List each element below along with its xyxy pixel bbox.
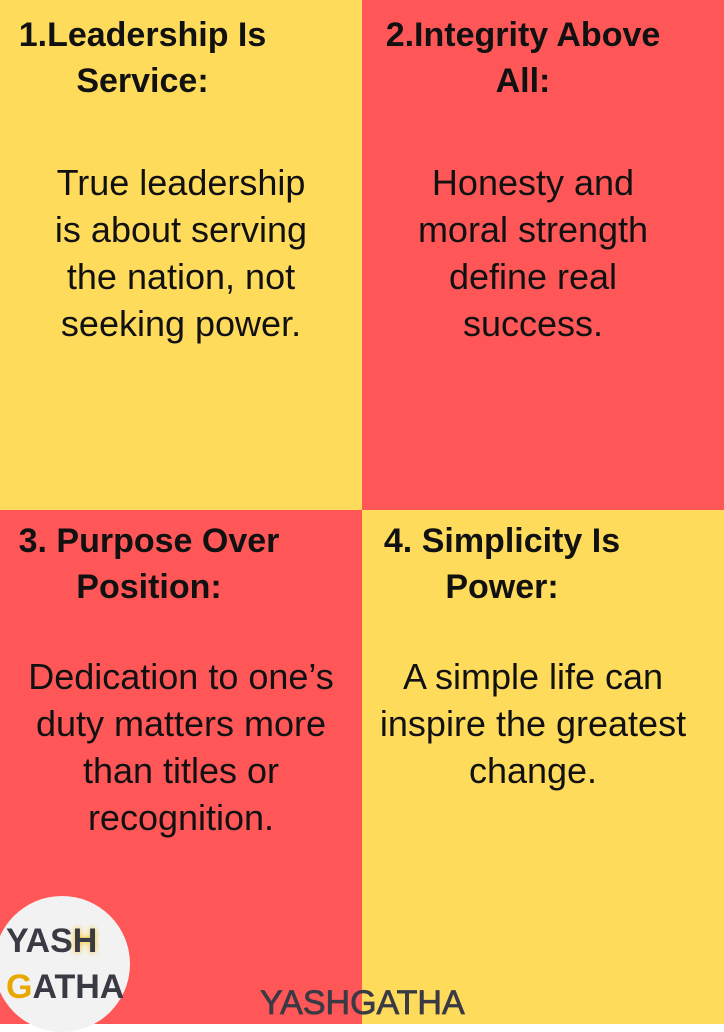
body text 3: Dedication to one’s — [28, 656, 334, 697]
panel: simplicity is power — [362, 510, 724, 1024]
body text 1: is about serving — [55, 209, 307, 250]
heading 2 — [386, 16, 660, 100]
body text 1 — [55, 162, 307, 344]
panel: leadership is service — [0, 0, 362, 510]
body text 3 — [28, 656, 334, 838]
footer brand text: YASHGATHA — [260, 984, 465, 1022]
body text 4: A simple life can — [403, 656, 663, 697]
heading 2: All: — [496, 62, 550, 100]
panel: integrity above all — [362, 0, 724, 510]
body text 4: change. — [469, 750, 597, 791]
body text 4: inspire the greatest — [380, 703, 686, 744]
body text 2: Honesty and — [432, 162, 634, 203]
logo text — [6, 922, 124, 1006]
body text 2: define real — [449, 256, 617, 297]
logo text: GATHA — [6, 968, 124, 1006]
heading 4: Power: — [445, 568, 559, 606]
body text 2 — [418, 162, 648, 344]
heading 1: Service: — [76, 62, 209, 100]
heading 2: 2.Integrity Above — [386, 16, 660, 54]
body text 1: the nation, not — [67, 256, 295, 297]
body text 2: moral strength — [418, 209, 648, 250]
body text 3: duty matters more — [36, 703, 326, 744]
heading 3: 3. Purpose Over — [19, 522, 279, 560]
body text 2: success. — [463, 303, 603, 344]
heading 1 — [19, 16, 266, 100]
heading 3 — [19, 522, 279, 606]
body text 3: than titles or — [83, 750, 279, 791]
logo: yashgatha circle — [0, 896, 130, 1032]
panel: purpose over position — [0, 510, 362, 1024]
body text 1: True leadership — [57, 162, 305, 203]
heading 4: 4. Simplicity Is — [384, 522, 620, 560]
heading 3: Position: — [76, 568, 222, 606]
body text 1: seeking power. — [61, 303, 301, 344]
body text 4 — [380, 656, 686, 791]
heading 4 — [384, 522, 620, 606]
logo text: YASH — [6, 922, 97, 960]
heading 1: 1.Leadership Is — [19, 16, 266, 54]
body text 3: recognition. — [88, 797, 274, 838]
